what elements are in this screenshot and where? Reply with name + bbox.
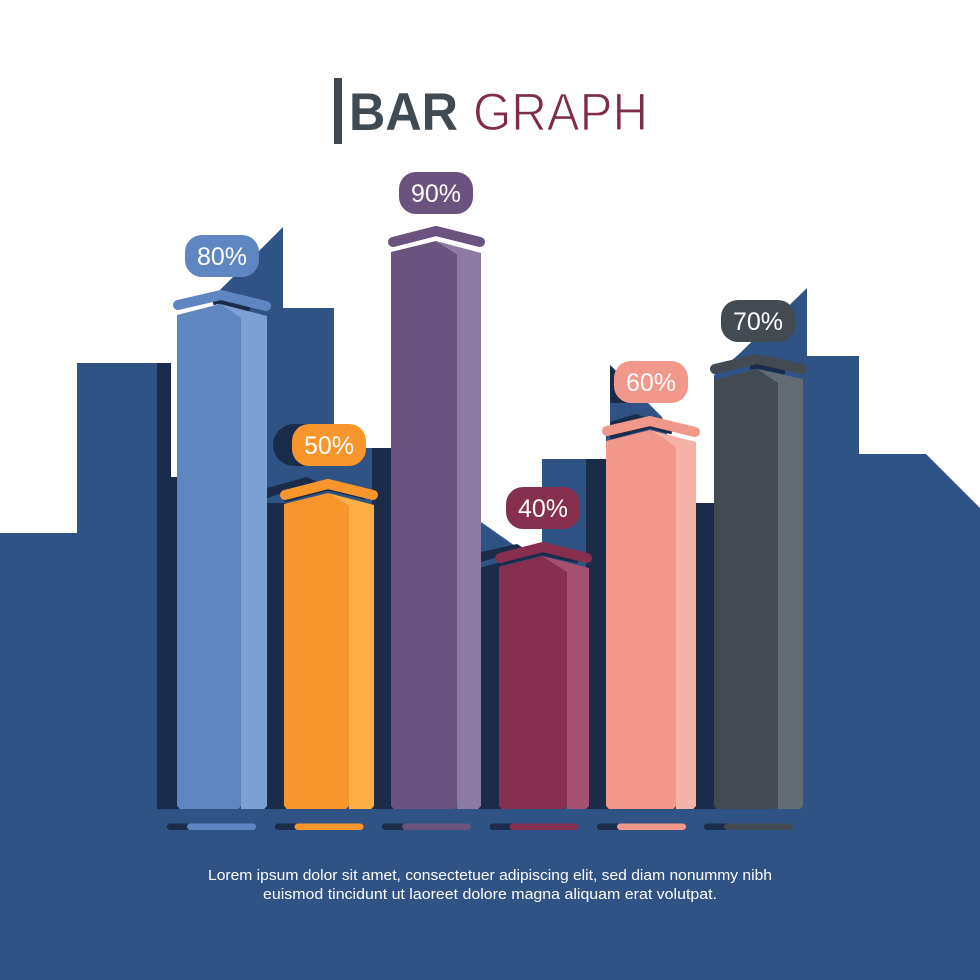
legend markers <box>167 824 793 830</box>
title: GRAPH <box>473 83 648 142</box>
label: 40%: 40% <box>518 495 568 523</box>
cap <box>285 484 373 495</box>
cap <box>393 231 480 242</box>
caption text <box>208 868 772 903</box>
bar 4: 40% <box>499 487 589 809</box>
bar 6: 70% <box>714 300 803 809</box>
title <box>334 78 648 144</box>
label: 90%: 90% <box>411 180 461 208</box>
bar 5: 60% <box>606 361 696 809</box>
bar 3: 90% <box>391 172 481 809</box>
city skyline background <box>0 227 980 980</box>
caption text: Lorem ipsum dolor sit amet, consectetuer adipiscing elit, sed diam nonummy nibh <box>208 868 772 884</box>
label: 70% <box>721 300 795 342</box>
label: 50% <box>292 424 366 466</box>
cap <box>715 359 802 369</box>
label: 40% <box>506 487 580 529</box>
label: 80%: 80% <box>197 243 247 271</box>
label: 50%: 50% <box>304 432 354 460</box>
bar 2: 50% <box>284 424 374 809</box>
caption text: euismod tincidunt ut laoreet dolore magna aliquam erat volutpat. <box>263 887 717 903</box>
dark pill behind 50% <box>273 424 343 466</box>
label: 90% <box>399 172 473 214</box>
label: 80% <box>185 235 259 277</box>
cap <box>607 421 695 432</box>
dark strips behind caps <box>267 477 318 498</box>
label: 70%: 70% <box>733 308 783 336</box>
cap <box>178 295 266 306</box>
cap <box>500 547 587 558</box>
bar 1: 80% <box>177 235 267 809</box>
title: BAR <box>349 83 458 142</box>
label: 60% <box>614 361 688 403</box>
dark building shadows <box>157 363 716 809</box>
label: 60%: 60% <box>626 369 676 397</box>
